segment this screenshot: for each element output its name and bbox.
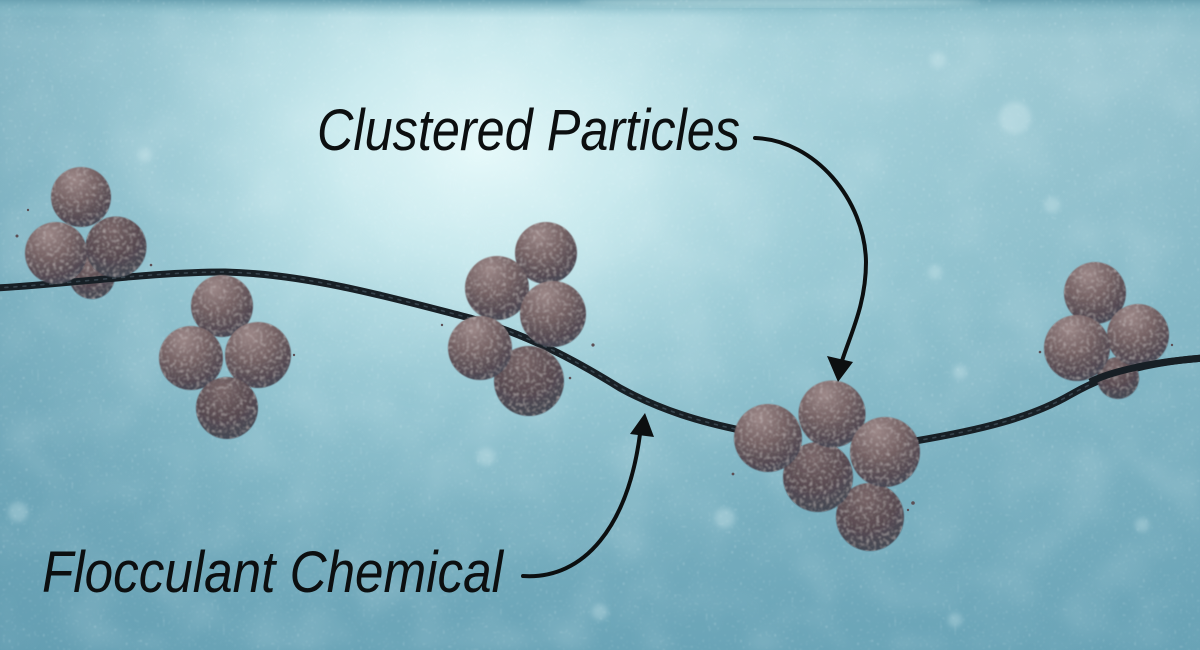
- loose debris specks: [16, 209, 1173, 511]
- cluster: far-left behind sphere: [69, 253, 115, 299]
- label: Clustered Particles: Clustered Particles: [317, 98, 740, 163]
- rope segment in front of far-right cluster: [1090, 358, 1200, 382]
- cluster: top left particles: [25, 167, 146, 284]
- flocculant rope strand: [0, 272, 1200, 441]
- cluster: centre-right particles: [734, 380, 920, 551]
- cluster: centre particles: [448, 222, 586, 416]
- label: Flocculant Chemical: Flocculant Chemical: [42, 540, 505, 605]
- cluster: far-right particles: [1044, 262, 1169, 399]
- arrow: to clustered particles: [755, 138, 866, 382]
- cluster: lower left particles: [159, 275, 291, 439]
- arrow: to flocculant chemical: [523, 413, 654, 576]
